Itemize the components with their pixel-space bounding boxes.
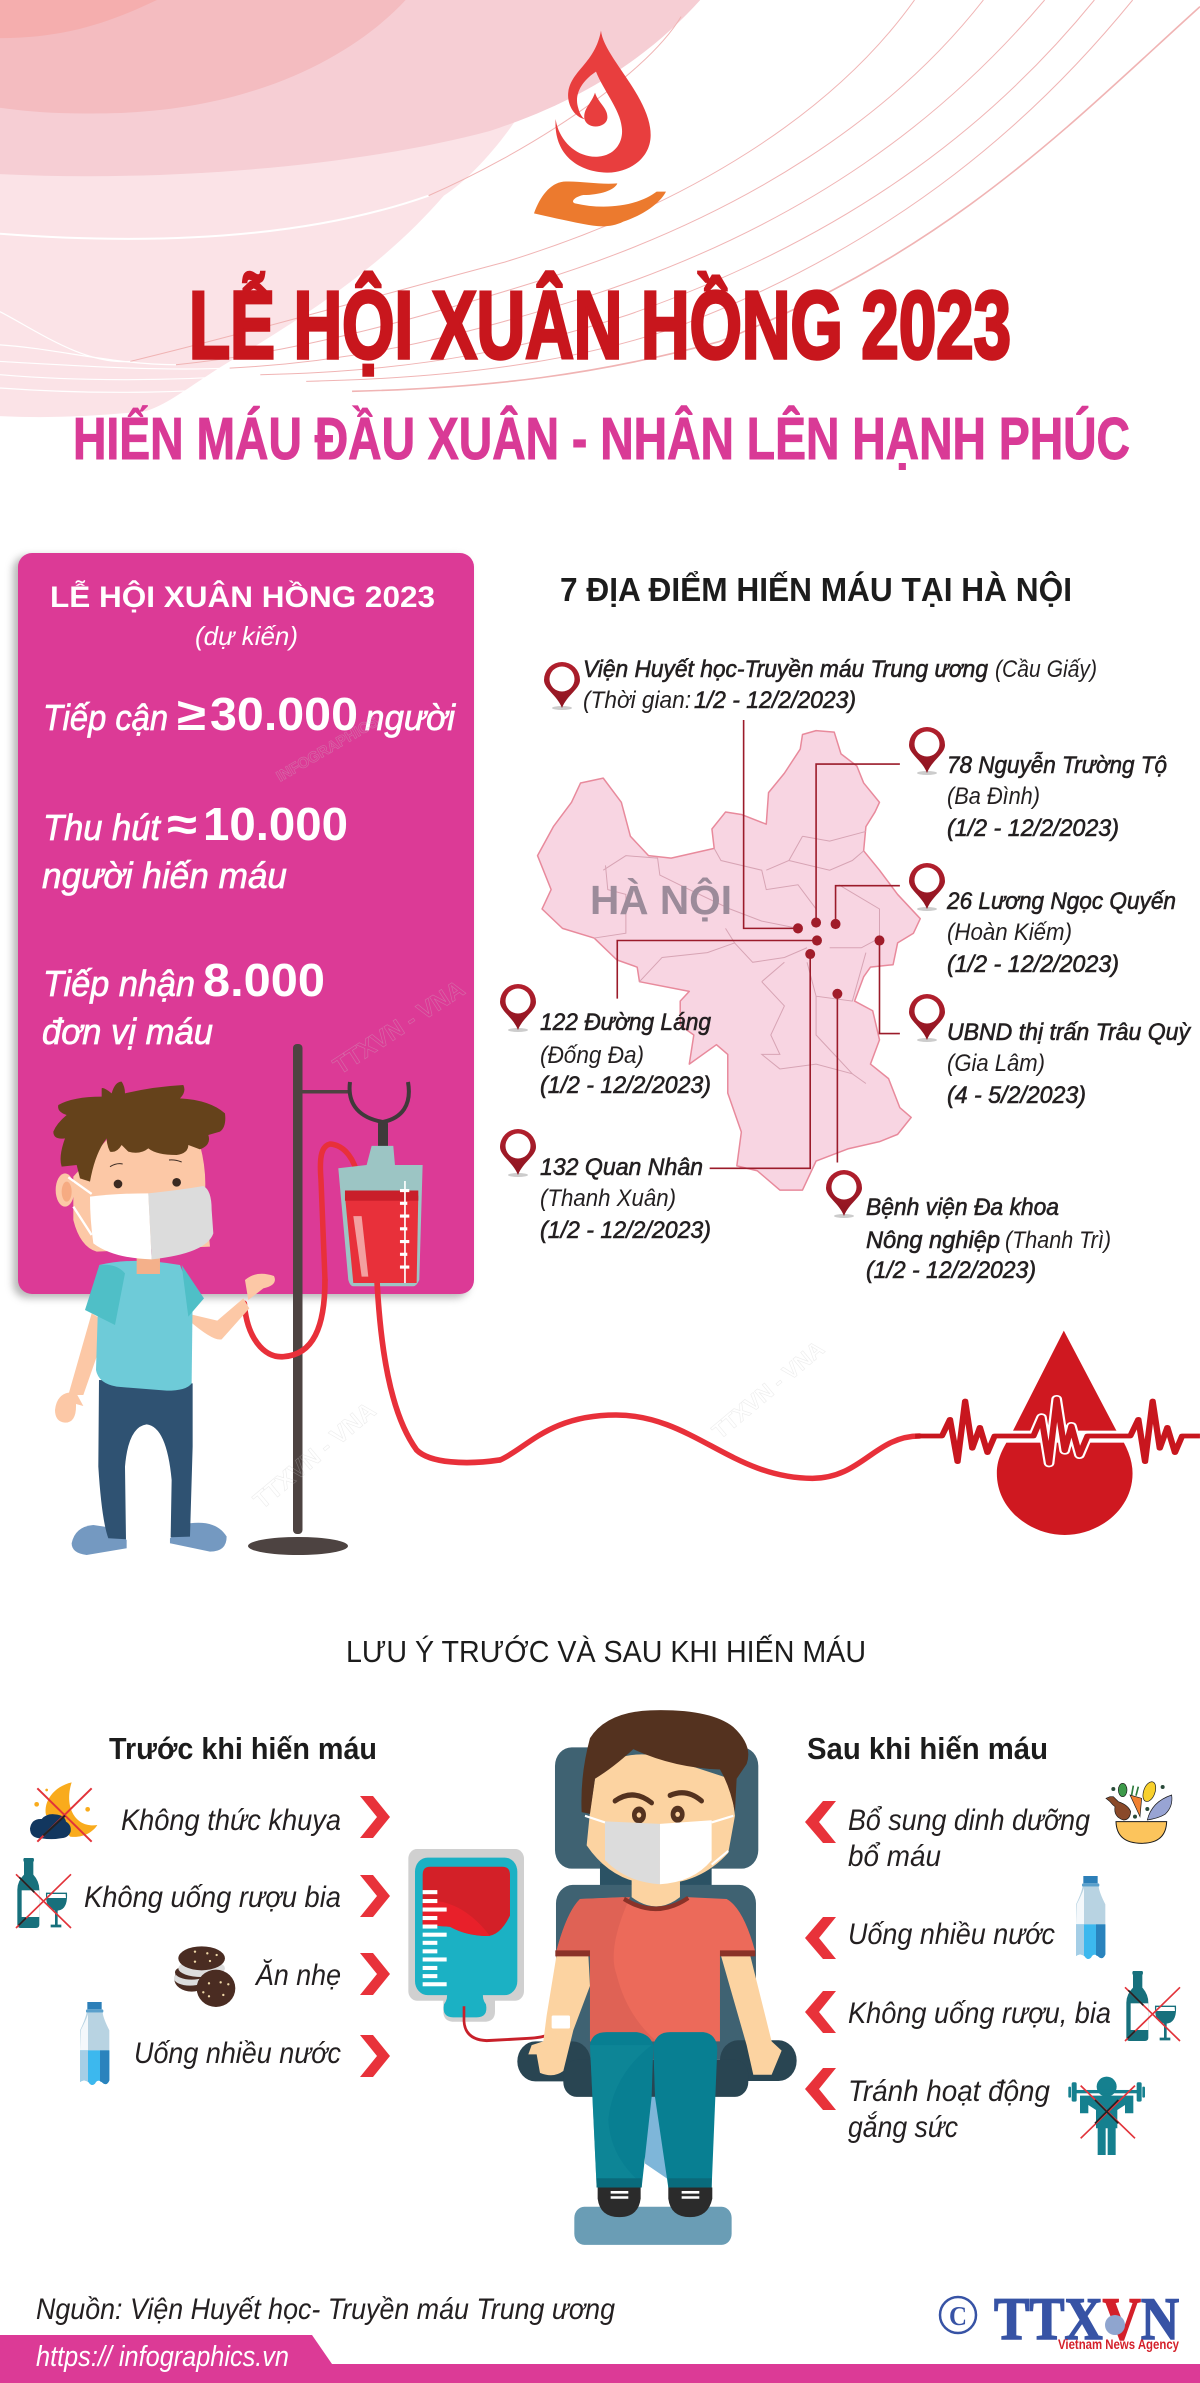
location: UBND thị trấn Trâu Quỳ: (4 - 5/2/2023) [947,1082,1086,1109]
legs [590,2032,717,2188]
watermarks: INFOGRAPHICS [274,713,382,785]
location: 78 Nguyễn Trường Tộ: 78 Nguyễn Trường Tộ [947,751,1167,779]
location: Bệnh viện Đa khoa Nông nghiệp: Nông nghiệp [866,1227,1000,1254]
footer band with URL: https:// infographics.vn [36,2341,289,2373]
chair and stand [517,1747,797,2245]
location: 78 Nguyễn Trường Tộ [909,727,1167,842]
stat: attract 10,000: ≈ [167,798,197,850]
icon: water bottle [80,2002,109,2085]
location: 26 Lương Ngọc Quyến [909,863,1176,978]
head [581,1710,748,1884]
list: after donating: Uống nhiều nước [848,1918,1055,1951]
location: 26 Lương Ngọc Quyến: (1/2 - 12/2/2023) [947,951,1119,978]
location: Viện Huyết học: 1/2 - 12/2/2023) [694,687,856,714]
location: 78 Nguyễn Trường Tộ: (Ba Đình) [947,783,1040,810]
list: after donating: Tránh hoạt động [848,2075,1050,2108]
icon: water bottle [1076,1876,1105,1959]
location: 26 Lương Ngọc Quyến: (Hoàn Kiếm) [947,919,1072,946]
stat: receive 8,000: 8.000 [203,954,325,1006]
list: after donating: bổ máu [848,1840,941,1873]
stat: reach 30,000: Tiếp cận [43,697,168,738]
list: after donating: Bổ sung dinh dưỡng [848,1804,1090,1837]
panel subheading: (dự kiến) [195,621,298,651]
location: 26 Lương Ngọc Quyến: 26 Lương Ngọc Quyến [946,888,1176,915]
list: before donating [84,1796,390,2077]
list: before donating: Không thức khuya [121,1804,341,1837]
location: Viện Huyết học: (Cầu Giấy) [995,656,1097,683]
location: Bệnh viện Đa khoa Nông nghiệp: Bệnh viện Đa khoa [866,1194,1059,1221]
stat: receive 8,000: đơn vị máu [42,1011,213,1052]
arms [528,1954,782,2075]
location: 122 Đường Láng: 122 Đường Láng [540,1009,712,1036]
neck [632,1875,680,1906]
icon: cookies [174,1946,235,2007]
stat: receive 8,000: Tiếp nhận [43,963,195,1004]
icon: no staying up late [30,1782,97,1842]
location: UBND thị trấn Trâu Quỳ [909,994,1192,1109]
heading: after donating: Sau khi hiến máu [807,1731,1048,1766]
watermarks: TTXVN - VNA [249,1397,381,1515]
stat: attract 10,000: người hiến máu [42,855,287,896]
location: 132 Quan Nhân: (1/2 - 12/2/2023) [540,1217,711,1244]
list: before donating: Ăn nhẹ [254,1959,341,1992]
list: after donating: Không uống rượu, bia [848,1997,1111,2030]
illustration: blood drop with heartbeat [915,1331,1200,1535]
location: 122 Đường Láng: (1/2 - 12/2/2023) [540,1072,711,1099]
illustration: blood tube to hand [244,1144,358,1357]
location: Bệnh viện Đa khoa Nông nghiệp: (1/2 - 12/2/2023) [866,1257,1036,1284]
stat: reach 30,000 [43,688,456,740]
list: before donating: Uống nhiều nước [134,2037,341,2070]
stat: reach 30,000: người [365,697,456,738]
location: Viện Huyết học [544,656,1097,714]
shoes [598,2188,712,2217]
source: Nguồn: Viện Huyết học- Truyền máu Trung ương [36,2293,615,2326]
location: UBND thị trấn Trâu Quỳ: (Gia Lâm) [947,1050,1045,1077]
watermarks: TTXVN - VNA [329,975,470,1080]
location: 122 Đường Láng: (Đống Đa) [540,1042,644,1069]
location: 132 Quan Nhân [500,1129,711,1244]
location: Bệnh viện Đa khoa Nông nghiệp [826,1170,1111,1284]
stat: attract 10,000: Thu hút [43,807,162,848]
stat: reach 30,000: 30.000 [210,688,358,740]
icon: no alcohol [1125,1971,1180,2041]
illustration: donor with mask [53,1082,275,1555]
panel heading: LỄ HỘI XUÂN HỒNG 2023 [50,580,435,614]
illustration: blood bag with tube [408,1849,560,2041]
watermarks: TTXVN - VNA [707,1336,829,1444]
heading: before donating: Trước khi hiến máu [109,1731,377,1766]
map: Hanoi [538,731,920,1190]
icon: nutritious food [1106,1780,1172,1843]
footer band with URL [0,2335,1200,2383]
location: 132 Quan Nhân: 132 Quan Nhân [540,1154,703,1181]
heading: 7 locations: 7 ĐỊA ĐIỂM HIẾN MÁU TẠI HÀ NỘI [560,570,1072,608]
icon: no alcohol [16,1858,71,1928]
stat: reach 30,000: ≥ [177,688,206,740]
stat: receive 8,000 [42,954,325,1052]
list: after donating [805,1801,1111,2144]
illustration: IV stand [248,1044,409,1555]
location: Viện Huyết học: (Thời gian: [583,687,691,714]
location: Bệnh viện Đa khoa Nông nghiệp: (Thanh Trì) [1005,1227,1111,1254]
logo: TTXVN copyright: C [949,2301,967,2331]
list: after donating: gắng sức [848,2111,958,2144]
illustration: seated donor [517,1710,797,2245]
heading: notes before and after donating: LƯU Ý TRƯỚC VÀ SAU KHI HIẾN MÁU [346,1634,866,1669]
panel: festival targets [13,553,474,1298]
list: before donating: Không uống rượu bia [84,1881,341,1914]
watermarks [249,713,829,1515]
illustration: blood bag [338,1146,423,1286]
logo: TTXVN copyright: TTXVN [994,2286,1179,2352]
location: Viện Huyết học: Viện Huyết học-Truyền máu Trung ương [583,656,989,683]
logo: blood drop and hand [534,31,666,226]
location: UBND thị trấn Trâu Quỳ: UBND thị trấn Trâu Quỳ [947,1019,1192,1046]
shirt [555,1897,755,2041]
map leader lines and dots [617,720,900,1168]
location: 78 Nguyễn Trường Tộ: (1/2 - 12/2/2023) [947,815,1119,842]
location: 122 Đường Láng [500,984,712,1099]
icon: no exertion [1068,2077,1145,2155]
stat: attract 10,000: 10.000 [203,798,348,850]
stat: attract 10,000 [42,798,348,896]
map label: HÀ NỘI [590,877,732,923]
illustration: long tube to blood drop [377,1273,920,1478]
background: pink fan with curved lines [0,0,1200,417]
location: 132 Quan Nhân: (Thanh Xuân) [540,1185,676,1212]
